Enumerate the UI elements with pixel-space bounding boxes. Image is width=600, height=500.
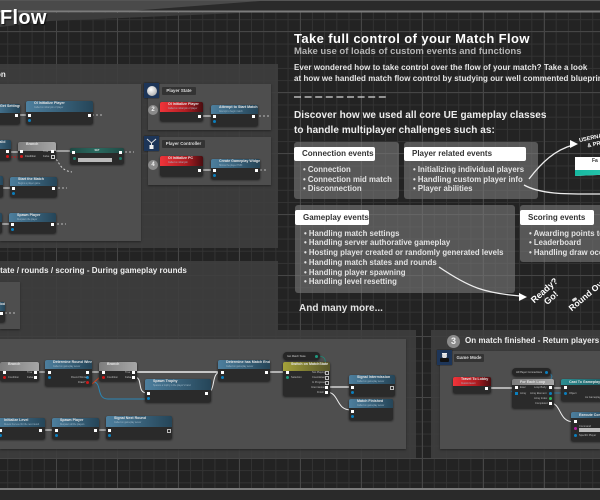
step number 3 <box>447 334 460 348</box>
node: branch: Branch <box>26 142 38 146</box>
node: branch 1: True <box>27 371 32 374</box>
node: red initialize: Called on initial join of player <box>168 108 197 110</box>
panel: scoring events <box>520 205 600 262</box>
node: initialize player: OI Initialize Player <box>34 101 65 105</box>
label: game mode: Game Mode <box>457 354 481 360</box>
panel: match finished outer <box>431 330 600 458</box>
discover heading: Discover how we used all core UE gameplay classes <box>294 110 547 121</box>
node: spawn player: Spawn Player <box>60 418 83 422</box>
list: connection: • Disconnection <box>303 184 362 193</box>
list: scoring: • Leaderboard <box>529 238 581 247</box>
title fragment: Flow <box>0 6 47 28</box>
node: branch 1: Branch <box>8 362 20 366</box>
chip: gameplay events: Gameplay events <box>303 212 369 222</box>
bottom band <box>0 488 600 500</box>
and many more: And many more... <box>299 303 383 314</box>
list: gameplay: • Handling match settings <box>304 228 399 238</box>
card: profile: Fa <box>592 158 598 164</box>
pill: get match state <box>283 352 320 360</box>
panel: during gameplay outer <box>0 261 278 330</box>
node: cropped <box>0 302 5 322</box>
node: switch on match state: Switch on MatchState <box>291 362 328 366</box>
node: branch 2: Condition <box>107 376 118 379</box>
step number 2 <box>148 105 158 115</box>
node: initialize level: Initialize Level <box>4 418 28 422</box>
node: red initialize <box>160 102 203 121</box>
step number 3: 3 <box>451 336 456 346</box>
node: red initialize pc: OI Initialize PC <box>168 156 193 160</box>
label: player controller <box>162 140 205 148</box>
node: travel to lobby: Travel To Lobby <box>461 377 488 381</box>
wires: player controller <box>203 170 266 171</box>
chip: player related events: Player related events <box>412 149 492 158</box>
chip: connection events <box>294 147 375 161</box>
pill: get match state: Get Match State <box>287 354 306 358</box>
intro text <box>294 62 600 82</box>
node: branch 1 <box>0 362 39 381</box>
node: for each loop: Completed <box>535 402 548 405</box>
node: branch 2: Branch <box>107 362 119 366</box>
panel: connection events <box>294 142 399 199</box>
heading: match finished: On match finished - Return players <box>465 336 599 345</box>
node: signal intermission: Called on gameplay server <box>357 380 384 382</box>
node: spawn player: Respawn the player <box>17 218 37 220</box>
node: execute console command: Command <box>579 425 591 428</box>
node: attempt to start match <box>211 105 258 126</box>
label: player state <box>162 87 196 95</box>
chip: player related events <box>404 147 526 161</box>
node: match finished: Called on gameplay server <box>357 404 384 406</box>
panel: game mode begin play <box>0 84 141 241</box>
node: spawn player <box>9 213 56 233</box>
panel: gameplay events <box>295 205 515 293</box>
node: determine round winner: Draw? <box>78 381 86 384</box>
node: spawn trophy: Spawns a trophy in the player's hand <box>153 384 191 386</box>
wires: player state <box>203 116 269 117</box>
panel: first stage outer <box>0 64 278 248</box>
node: branch 1: False <box>27 376 33 379</box>
label: ready go: Go! <box>542 289 560 306</box>
node: spawn trophy <box>145 379 211 402</box>
node: execute console command <box>571 412 600 441</box>
list: player related: • Handling custom player info <box>413 175 523 184</box>
node: match finished <box>349 399 393 420</box>
subheading: Make use of loads of custom events and functions <box>294 46 522 56</box>
chip: scoring events: Scoring events <box>528 212 585 222</box>
node: attempt to start match: Attempt to begin match <box>219 110 243 112</box>
chip: scoring events <box>520 210 594 224</box>
node: signal intermission <box>349 375 395 396</box>
node: initialize player <box>26 101 93 124</box>
wires: rounds <box>39 356 349 430</box>
node: create gameplay widget: Shows the player HUD <box>219 164 242 166</box>
node: initialize player: Called on initial join of player <box>34 106 63 108</box>
dashed divider <box>294 96 386 98</box>
node: start match left <box>0 176 3 197</box>
label: player state: Player State <box>166 88 192 93</box>
list: connection <box>303 165 392 193</box>
list: scoring <box>529 228 600 257</box>
node: branch 2 <box>99 362 137 381</box>
list: gameplay: • Handling match states and rounds <box>304 258 437 267</box>
list: gameplay: • Handling level resetting <box>304 277 397 286</box>
node: start the match <box>10 177 57 197</box>
wires: return <box>491 374 571 422</box>
node: determine has match ended: Called on gameplay server <box>226 366 253 368</box>
panel: game state sub <box>0 282 20 329</box>
node: cast to: Object <box>569 392 576 395</box>
node: spawn trophy: Spawn Trophy <box>153 379 178 383</box>
intro text: Ever wondered how to take control over the flow of your match? Take a look <box>294 62 587 72</box>
step number 4 <box>148 160 158 170</box>
node: determine round winner: Round Winner <box>71 376 88 379</box>
node: switch on match state: Intermission <box>311 386 325 389</box>
label: player controller: Player Controller <box>166 141 201 146</box>
node: spawn player: Spawn Player <box>17 213 40 217</box>
step number 2: 2 <box>151 107 155 113</box>
node: for each loop: Exec <box>520 386 526 389</box>
node: spawn left <box>0 213 2 233</box>
node: match finished: Match Finished <box>357 399 383 403</box>
node: spawn player: Respawn all the players <box>60 424 84 426</box>
node: red initialize pc: Called on initial join <box>168 162 188 164</box>
node: branch 2: False <box>125 376 131 379</box>
node: determine round winner <box>45 360 92 386</box>
icon: game mode <box>437 350 452 365</box>
node: execute console command: Specific Player <box>579 434 596 437</box>
node: cast to <box>561 379 600 401</box>
label: ready go: Ready? <box>529 276 560 305</box>
arrows <box>438 140 600 301</box>
heading: during gameplay: State / rounds / scoring - During gameplay rounds <box>0 266 187 275</box>
list: connection: • Connection <box>303 165 351 174</box>
discover heading: to handle multiplayer challenges such as: <box>294 125 495 136</box>
icon: player controller <box>144 136 159 151</box>
node: travel to lobby: Custom Event <box>461 382 475 384</box>
node: red initialize pc <box>160 156 203 176</box>
node: switch on match state: Finish <box>317 391 324 394</box>
card: profile <box>575 157 600 176</box>
wire stub <box>5 312 15 314</box>
node: signal intermission: Signal Intermission <box>357 375 390 379</box>
heading: take full control: Take full control of your Match Flow <box>294 30 530 46</box>
panel: during gameplay outer lower <box>0 330 416 458</box>
node: switch on match state: Selection <box>291 376 302 379</box>
list: gameplay: • Hosting player created or randomly generated levels <box>304 248 503 257</box>
node: travel to lobby <box>453 377 491 393</box>
node: determine has match ended <box>218 360 270 381</box>
icon: player state sphere <box>144 83 159 98</box>
node: switch on match state: Countdown <box>312 376 325 379</box>
panel: player related events <box>404 142 538 199</box>
node: spawn player <box>52 418 99 439</box>
wires: game mode <box>2 114 134 224</box>
node: determine round winner: Called on gameplay server <box>53 366 80 368</box>
list: player related <box>413 165 524 193</box>
node: signal next round <box>106 416 172 439</box>
node: switch on match state: In Progress <box>312 381 325 384</box>
step number 4: 4 <box>151 162 155 168</box>
node: branch: True <box>43 150 48 153</box>
node: switch on match state <box>283 362 330 396</box>
node: branch <box>18 142 56 160</box>
node: has authority <box>0 140 11 160</box>
panel: game mode return <box>440 351 600 449</box>
icon: round over marker <box>572 297 577 302</box>
list: connection: • Connection mid match <box>303 175 392 184</box>
node: attempt to start match: Attempt to Start Match <box>219 105 258 109</box>
node: for each loop: Array Element <box>530 392 546 395</box>
node: set: SET <box>94 149 100 152</box>
list: gameplay: • Handling player spawning <box>304 268 406 276</box>
node: initialize level: Resets the level for the next round <box>4 424 39 426</box>
node: settings <box>0 104 20 124</box>
panel: player state <box>148 84 271 130</box>
list: gameplay <box>304 228 504 286</box>
node: for each loop: Loop Body <box>534 386 546 389</box>
node: set <box>70 148 124 164</box>
label: game mode <box>454 354 484 362</box>
node: start the match: Start the Match <box>18 177 44 181</box>
list: player related: • Initializing individual players <box>413 165 524 174</box>
node: create gameplay widget <box>211 159 260 179</box>
node: branch: False <box>43 155 49 158</box>
list: gameplay: • Handling server authorative gameplay <box>304 238 450 247</box>
node: red initialize: OI Initialize Player <box>168 102 199 106</box>
panel: rounds graph <box>0 339 406 449</box>
node: switch on match state: Not Playing <box>312 371 325 374</box>
pill: player connections <box>512 368 551 376</box>
node: for each loop: Array Index <box>534 397 547 400</box>
list: player related: • Player abilities <box>413 184 473 193</box>
node: signal next round: Called on gameplay server <box>114 422 141 424</box>
pill: player connections: All Player Connections <box>516 370 542 374</box>
top band <box>0 0 600 27</box>
node: for each loop <box>512 379 554 408</box>
chip: connection events: Connection events <box>302 149 374 158</box>
node: start the match: Begins a player game <box>18 182 40 184</box>
node: branch 1: Condition <box>8 376 19 379</box>
node: branch: Condition <box>25 155 36 158</box>
chip: gameplay events <box>295 210 369 224</box>
node: branch 2: True <box>125 371 130 374</box>
panel: player controller <box>148 137 271 185</box>
discover heading <box>294 110 547 136</box>
node: for each loop: For Each Loop <box>520 380 545 384</box>
node: for each loop: Array <box>520 392 526 395</box>
node: signal next round: Signal Next Round <box>114 416 146 420</box>
node: initialize level <box>0 418 45 439</box>
